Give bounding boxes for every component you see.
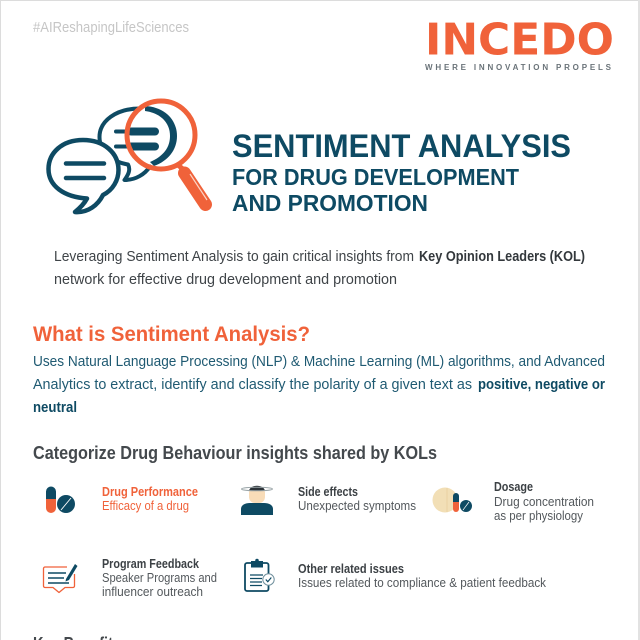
text: program feedback: Speaker Programs and (102, 571, 217, 585)
text: program feedback: Program Feedback (102, 557, 199, 571)
title: FOR DRUG DEVELOPMENT (232, 164, 520, 190)
text: other related issues (298, 562, 547, 590)
text: side effects: Side effects (298, 485, 358, 499)
item: program feedback (44, 557, 217, 599)
hashtag: #AIReshapingLifeSciences (33, 20, 189, 36)
definition text (33, 354, 605, 416)
text: other related issues: Other related issues (298, 562, 404, 576)
intro text (54, 249, 585, 288)
item: other related issues (245, 559, 547, 591)
item: dosage (432, 480, 594, 523)
text: drug performance (102, 485, 198, 513)
item: drug performance (46, 485, 198, 513)
text: dosage: Dosage (494, 480, 533, 494)
heading: what is sentiment analysis: What is Sentiment Analysis? (33, 322, 310, 346)
intro text: Key Opinion Leaders (KOL) (419, 249, 585, 265)
text: program feedback (102, 557, 217, 599)
icon: magnifying glass (127, 101, 207, 204)
logo: Incedo: INCEDO (425, 14, 614, 66)
item: side effects (241, 485, 416, 515)
icon: left speech bubble (48, 140, 118, 212)
text: program feedback: influencer outreach (102, 585, 203, 599)
logo: Incedo: WHERE INNOVATION PROPELS (425, 63, 612, 72)
title: AND PROMOTION (232, 190, 428, 216)
heading: categorize drug behaviour: Categorize Drug Behaviour insights shared by KOLs (33, 442, 437, 463)
text: dosage: as per physiology (494, 509, 584, 523)
text: other related issues: Issues related to compliance & patient feedback (298, 576, 547, 590)
title (232, 128, 571, 216)
text: drug performance: Efficacy of a drug (102, 499, 189, 513)
definition text: positive, negative or (478, 377, 605, 393)
icon: clipboard with check (245, 559, 274, 591)
definition text: neutral (33, 400, 77, 416)
icon: body clock and pills (432, 488, 472, 512)
icon: capsule and tablet (46, 486, 75, 513)
text: side effects: Unexpected symptoms (298, 499, 416, 513)
icon: speech bubbles with magnifying glass (48, 101, 207, 212)
icon: right speech bubble (100, 106, 177, 180)
icon: dizzy head (241, 486, 273, 515)
text: dosage (494, 480, 594, 523)
text: side effects (298, 485, 416, 513)
text: dosage: Drug concentration (494, 495, 594, 509)
definition text: Uses Natural Language Processing (NLP) & Machine Learning (ML) algorithms, and Advanced (33, 354, 605, 370)
text: drug performance: Drug Performance (102, 485, 198, 499)
intro text: network for effective drug development and promotion (54, 272, 397, 288)
icon: feedback note and pen (44, 564, 78, 592)
definition text: Analytics to extract, identify and classify the polarity of a given text as (33, 377, 472, 393)
title: SENTIMENT ANALYSIS (232, 128, 571, 164)
intro text: Leveraging Sentiment Analysis to gain critical insights from (54, 249, 414, 265)
